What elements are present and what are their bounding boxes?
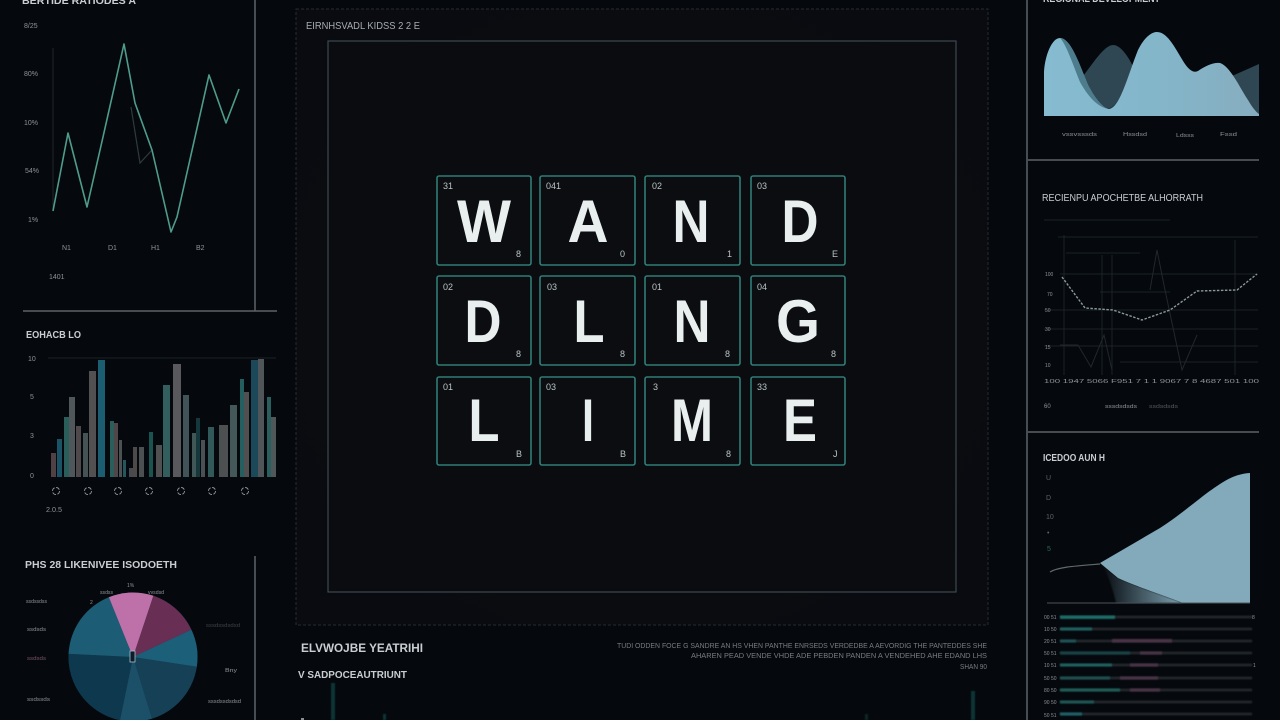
panel: line chart xyxy=(22,0,239,281)
tile A: 041 xyxy=(546,181,561,191)
tile D second row xyxy=(437,276,531,365)
tile L: 03 xyxy=(547,282,557,292)
tile G: 8 xyxy=(831,349,836,359)
tile E: 33 xyxy=(757,382,767,392)
tile I: B xyxy=(620,449,626,459)
row labels: 10 51 xyxy=(1044,663,1057,669)
growth chart heading: ICEDOO AUN H xyxy=(1043,453,1105,464)
tile L third row: B xyxy=(516,449,522,459)
tile L third row xyxy=(437,377,531,465)
bottom paragraph: AHAREN PEAD VENDE VHDE ADE PEBDEN PANDEN A VENDEHED AHE EDAND LHS xyxy=(691,653,987,660)
panel: right dividers xyxy=(1027,0,1259,720)
pie labels xyxy=(26,583,241,705)
tile D: 03 xyxy=(757,181,767,191)
pie labels: ssdsds xyxy=(27,627,47,633)
row labels: 20 51 xyxy=(1044,639,1057,645)
tile M: 3 xyxy=(653,382,658,392)
y axis labels: 10 xyxy=(1045,363,1051,369)
y axis labels: 50 xyxy=(1045,308,1051,314)
line chart x axis labels: H1 xyxy=(151,245,160,252)
bottom paragraph: TUDI ODDEN FOCE G SANDRE AN HS VHEN PANTHE ENRSEDS VERDEDBE A AEVORDIG THE PANTEDDES SHE xyxy=(617,643,987,650)
pie labels: ssdssds xyxy=(27,697,51,703)
area chart axis labels: Hssdsd xyxy=(1123,132,1147,138)
growth area fade xyxy=(1100,563,1183,603)
pie labels: sssdssdsdsd xyxy=(208,699,241,705)
area fold shadow xyxy=(1060,38,1109,109)
pie chart heading: PHS 28 LIKENIVEE ISODOETH xyxy=(25,560,177,571)
row labels: 8 xyxy=(1252,615,1255,621)
row labels: 50 50 xyxy=(1044,676,1057,682)
panel: pie chart xyxy=(25,560,241,720)
tile N xyxy=(645,176,740,265)
legend: ssdsdsds xyxy=(1149,404,1179,410)
tile W: 31 xyxy=(443,181,453,191)
line chart x axis labels xyxy=(49,245,205,281)
line chart y axis labels: 8/25 xyxy=(24,23,38,30)
tile N: 1 xyxy=(727,249,732,259)
bottom small marker xyxy=(301,718,304,720)
growth y axis labels: 5 xyxy=(1047,546,1051,553)
frame heading: EIRNHSVADL KIDSS 2 2 E xyxy=(306,21,420,32)
tile E: J xyxy=(833,449,838,459)
main trend line xyxy=(53,44,239,232)
growth leading line xyxy=(1050,564,1100,572)
tile N second row: 8 xyxy=(725,349,730,359)
legend xyxy=(1044,404,1179,410)
tile M xyxy=(645,377,740,465)
row tracks xyxy=(1060,617,1252,714)
panel: growth area chart xyxy=(1043,453,1250,603)
line chart y axis labels: 80% xyxy=(24,71,38,78)
row labels: 10 50 xyxy=(1044,627,1057,633)
row labels: 90 50 xyxy=(1044,700,1057,706)
growth y axis labels: • xyxy=(1047,530,1050,537)
tile A xyxy=(540,176,635,265)
bar chart y axis labels: 5 xyxy=(30,394,34,401)
panel: bottom text block xyxy=(298,641,987,720)
growth y axis labels xyxy=(1046,475,1054,553)
outer dashed frame xyxy=(296,9,988,625)
bottom faint teal bars xyxy=(331,683,975,720)
tile L: L xyxy=(574,288,604,355)
bottom paragraph: SHAN 90 xyxy=(960,664,987,671)
tile I xyxy=(540,377,635,465)
panel: horizontal bars right xyxy=(1044,615,1256,719)
tile N second row xyxy=(645,276,740,365)
tile M: M xyxy=(671,387,713,454)
tile D: E xyxy=(832,249,838,259)
bars xyxy=(51,359,276,477)
tile G: 04 xyxy=(757,282,767,292)
tile D xyxy=(751,176,845,265)
growth y axis labels: D xyxy=(1046,495,1051,502)
tile M: 8 xyxy=(726,449,731,459)
back area series xyxy=(1080,45,1259,116)
bar chart top gridline xyxy=(48,357,276,359)
tile I: 03 xyxy=(546,382,556,392)
y axis labels: 70 xyxy=(1047,292,1053,298)
tile I: I xyxy=(582,387,594,454)
row labels: 1 xyxy=(1253,663,1256,669)
tile G: G xyxy=(776,288,820,355)
line chart y axis labels: 1% xyxy=(28,217,38,224)
area chart axis labels xyxy=(1062,132,1237,139)
tile L: 8 xyxy=(620,349,625,359)
row labels: 50 51 xyxy=(1044,713,1057,719)
mauve segments xyxy=(1112,639,1172,692)
line chart x axis labels: 1401 xyxy=(49,274,65,281)
tile W: W xyxy=(457,188,511,255)
tile N second row: N xyxy=(674,288,710,355)
bar chart y axis labels: 0 xyxy=(30,473,34,480)
tile N: 02 xyxy=(652,181,662,191)
row labels: 50 51 xyxy=(1044,651,1057,657)
legend: sssdsdsds xyxy=(1105,404,1138,410)
pie labels: 1% xyxy=(127,583,135,589)
pie labels: 2 xyxy=(90,600,93,606)
tile E: E xyxy=(783,387,817,454)
x axis labels: 100 1947 5066 F951 7 1 1 9067 7 8 4687 501 100 xyxy=(1044,379,1259,385)
multi-line heading: RECIENPU APOCHETBE ALHORRATH xyxy=(1042,193,1203,204)
pie labels: ssdssdss xyxy=(26,599,48,605)
inner frame xyxy=(328,41,956,592)
tile A: A xyxy=(568,188,608,255)
bar chart y axis labels: 3 xyxy=(30,433,34,440)
dashed trend line xyxy=(1062,274,1257,320)
line chart x axis labels: N1 xyxy=(62,245,71,252)
row labels: 00 51 xyxy=(1044,615,1057,621)
row labels: 80 50 xyxy=(1044,688,1057,694)
bottom heading: ELVWOJBE YEATRIHI xyxy=(301,641,423,655)
tile W xyxy=(437,176,531,265)
line chart axis xyxy=(52,48,54,210)
tile N: N xyxy=(672,188,710,255)
panel: area chart top right xyxy=(1043,0,1259,139)
area chart axis labels: Fssd xyxy=(1220,132,1237,138)
pie slices xyxy=(68,592,198,720)
tile W: 8 xyxy=(516,249,521,259)
line chart x axis labels: D1 xyxy=(108,245,117,252)
bar chart category icons xyxy=(52,488,248,494)
faint overlay lines xyxy=(1060,250,1197,370)
front area series xyxy=(1044,32,1259,116)
y axis labels: 30 xyxy=(1045,327,1051,333)
pie labels: ssdss xyxy=(100,590,114,596)
y axis labels: 100 xyxy=(1045,272,1054,278)
line chart y axis labels xyxy=(24,23,39,224)
bottom paragraph xyxy=(617,643,987,671)
pie labels: sssdssdsdsd xyxy=(206,623,240,629)
pie labels: Bny xyxy=(225,668,238,674)
row labels xyxy=(1044,615,1256,719)
line chart y axis labels: 54% xyxy=(25,168,39,175)
panel: bar chart xyxy=(26,330,276,514)
tile L third row: L xyxy=(468,387,500,454)
line chart y axis labels: 10% xyxy=(24,120,38,127)
growth y axis labels: U xyxy=(1046,475,1051,482)
bar chart footnote: 2.0.5 xyxy=(46,507,62,514)
area chart axis labels: Ldsss xyxy=(1176,133,1195,139)
tile D: D xyxy=(782,188,818,255)
bar chart y axis labels xyxy=(28,356,36,480)
tile L xyxy=(540,276,635,365)
tile D second row: 02 xyxy=(443,282,453,292)
panel: multi-line chart right xyxy=(1042,193,1259,410)
tile G xyxy=(751,276,845,365)
legend: 60 xyxy=(1044,404,1051,410)
tile E xyxy=(751,377,845,465)
growth area fill xyxy=(1100,473,1250,603)
bottom subheading: V SADPOCEAUTRIUNT xyxy=(298,670,407,681)
bar chart y axis labels: 10 xyxy=(28,356,36,363)
line chart x axis labels: B2 xyxy=(196,245,205,252)
panel: left dividers xyxy=(23,0,277,720)
y axis labels xyxy=(1045,272,1054,369)
tile N second row: 01 xyxy=(652,282,662,292)
bar chart heading: EOHACB LO xyxy=(26,330,81,341)
grid lines xyxy=(1044,220,1258,375)
secondary faint line xyxy=(131,107,152,163)
teal segments xyxy=(1060,616,1130,716)
growth baseline xyxy=(1047,602,1250,604)
tile D second row: 8 xyxy=(516,349,521,359)
growth y axis labels: 10 xyxy=(1046,514,1054,521)
pie labels: vvsdsd xyxy=(148,590,164,596)
y axis labels: 15 xyxy=(1045,345,1051,351)
tile L third row: 01 xyxy=(443,382,453,392)
panel: letter tile grid xyxy=(437,176,845,465)
area chart axis labels: vssvsssds xyxy=(1062,132,1098,138)
tile D second row: D xyxy=(464,288,502,355)
tile A: 0 xyxy=(620,249,625,259)
pie labels: ssdsds xyxy=(27,656,47,662)
